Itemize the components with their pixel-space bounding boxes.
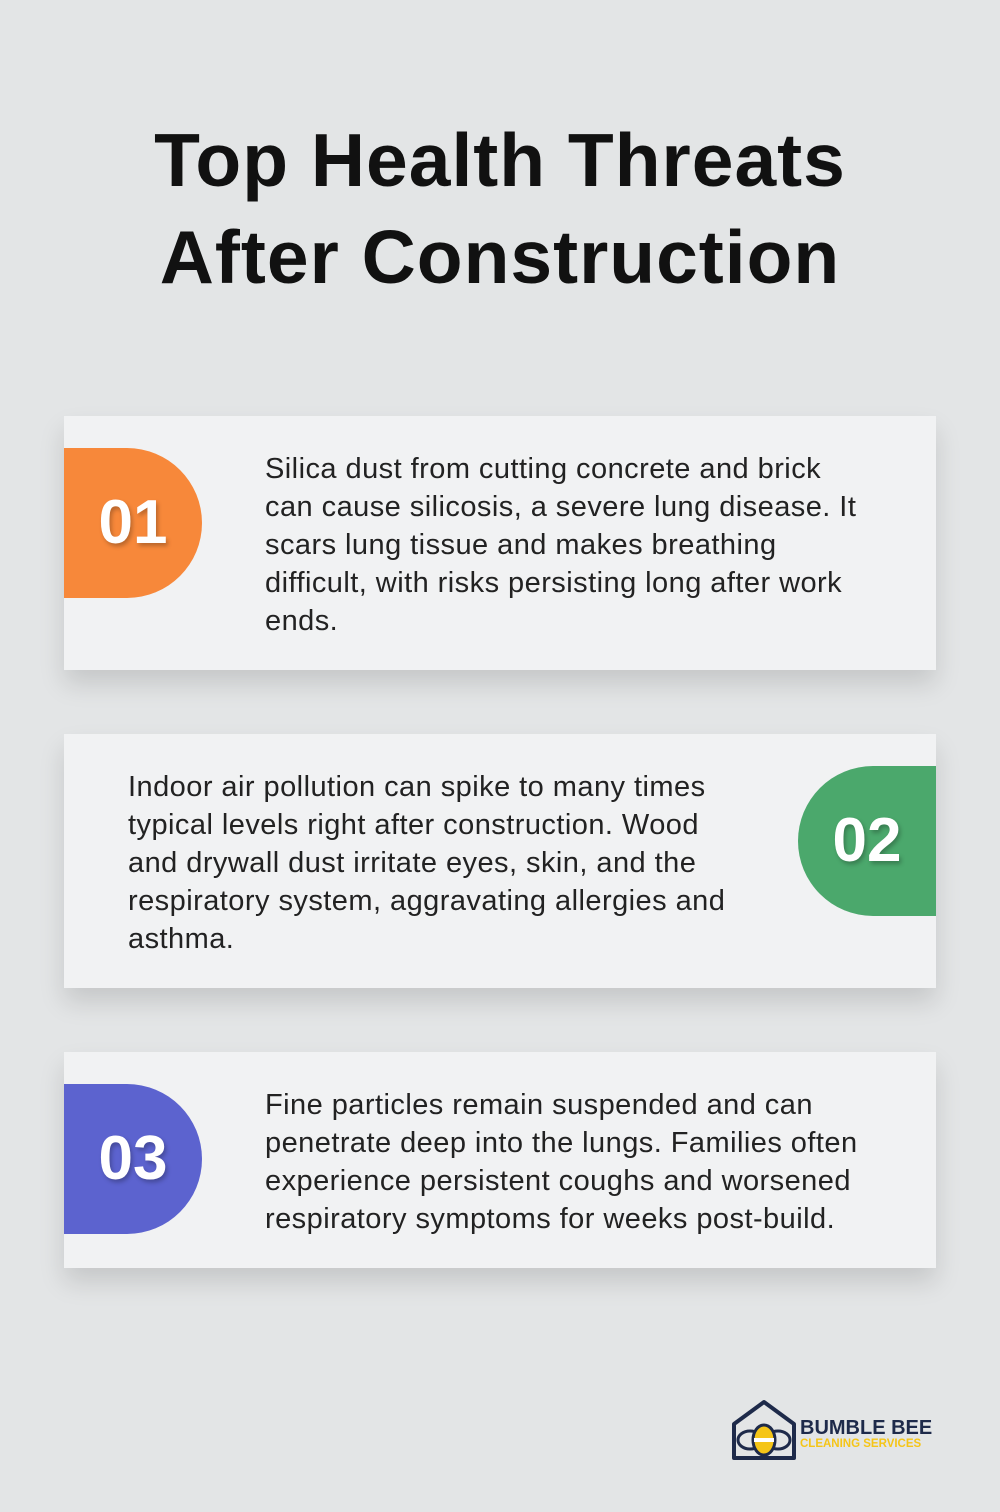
badge 01 (64, 448, 202, 598)
text 03 (265, 1089, 858, 1235)
title: Top Health Threats (154, 118, 846, 202)
text 01: ends. (265, 605, 338, 637)
logo (732, 1400, 932, 1460)
logo text: BUMBLE BEE (800, 1417, 932, 1439)
text 03: Fine particles remain suspended and can (265, 1089, 813, 1121)
badge 01: 01 (99, 488, 167, 557)
panel: threat 02 (64, 734, 936, 988)
title (154, 118, 846, 299)
text 02: typical levels right after construction. Wood (128, 809, 699, 841)
badge 03: 03 (99, 1124, 167, 1193)
title: After Construction (160, 215, 840, 299)
logo: CLEANING SERVICES (800, 1438, 921, 1450)
text 01: Silica dust from cutting concrete and brick (265, 453, 821, 485)
text 02: asthma. (128, 923, 234, 955)
text 02 (128, 771, 725, 955)
panel: threat 03 (64, 1052, 936, 1268)
text 01: scars lung tissue and makes breathing (265, 529, 777, 561)
text 01: can cause silicosis, a severe lung disease. It (265, 491, 856, 523)
badge 03 (64, 1084, 202, 1234)
icon: bee house (732, 1400, 796, 1460)
badge 02 (798, 766, 936, 916)
text 01 (265, 453, 856, 637)
text 01: difficult, with risks persisting long after work (265, 567, 842, 599)
badge 02: 02 (833, 806, 901, 875)
text 03: experience persistent coughs and worsened (265, 1165, 851, 1197)
text 02: and drywall dust irritate eyes, skin, and the (128, 847, 696, 879)
text 02: Indoor air pollution can spike to many times (128, 771, 706, 803)
panel: threat 01 (64, 416, 936, 670)
text 03: respiratory symptoms for weeks post-build. (265, 1203, 835, 1235)
text 03: penetrate deep into the lungs. Families often (265, 1127, 858, 1159)
text 02: respiratory system, aggravating allergies and (128, 885, 725, 917)
